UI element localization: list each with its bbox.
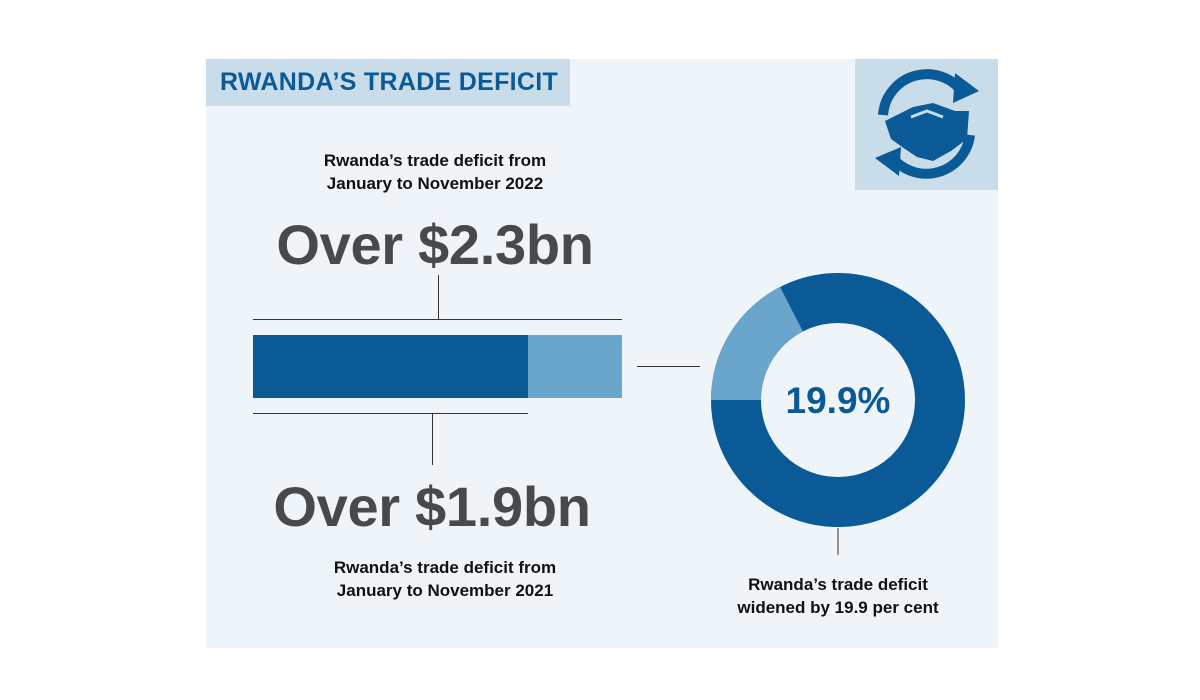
panel: background	[206, 59, 998, 648]
caption: 2021	[334, 558, 556, 600]
caption: 2022: Rwanda’s trade deficit from	[324, 151, 546, 170]
caption: donut: widened by 19.9 per cent	[737, 598, 939, 617]
donut chart	[711, 273, 965, 555]
caption: donut	[737, 575, 939, 617]
caption: 2022: January to November 2022	[327, 174, 543, 193]
caption: 2022	[324, 151, 546, 193]
bar chart	[253, 275, 700, 465]
icon: handshake with circular arrows	[855, 59, 998, 190]
title: RWANDA’S TRADE DEFICIT	[220, 68, 558, 96]
value: 2022: Over $2.3bn	[276, 213, 594, 276]
title	[206, 59, 570, 106]
caption: 2021: January to November 2021	[337, 581, 553, 600]
caption: 2021: Rwanda’s trade deficit from	[334, 558, 556, 577]
caption: donut: Rwanda’s trade deficit	[748, 575, 928, 594]
donut chart: 19.9%	[786, 380, 890, 421]
value: 2021: Over $1.9bn	[273, 475, 591, 538]
